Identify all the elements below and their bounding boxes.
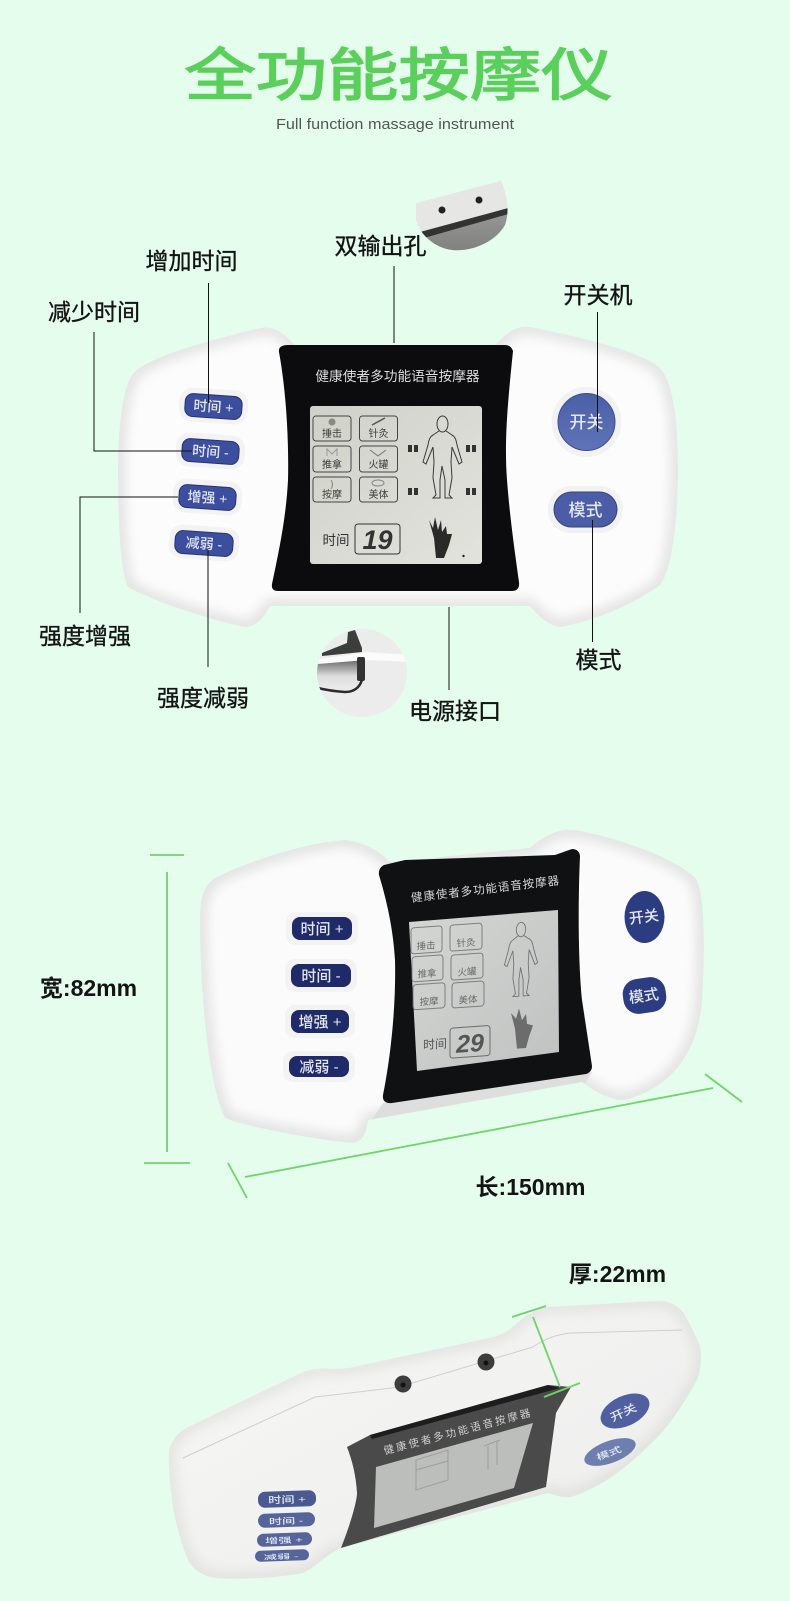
seam line [183,1330,682,1458]
button: 时间 -: 时间 - [301,968,341,985]
button: 减弱 - [168,524,240,562]
bezel heading: 健康使者多功能语音按摩器 [315,368,480,384]
callout: 强度减弱: 强度减弱 [157,685,249,711]
button: 增强 + [257,1532,312,1547]
mode box: 火罐: 火罐 [368,458,388,471]
callout: 强度增强 [39,497,178,649]
button: 时间 -: 时间 - [192,442,230,461]
button: 模式: 模式 [595,1444,623,1463]
button: 开关 [552,387,622,457]
output jack right [478,1354,494,1370]
bezel heading: 健康使者多功能语音按摩器 [410,873,561,905]
button: 时间 -: 时间 - [269,1515,304,1527]
mode box: 美体 [360,477,398,502]
device body [110,320,690,640]
device body [160,1295,710,1585]
mode box: 针灸: 针灸 [368,427,388,440]
button: 时间 + [286,912,358,945]
LCD contents: 按摩 [420,995,439,1008]
device 2: dimension view [190,825,715,1150]
device body [190,825,715,1150]
body figure [423,416,462,498]
thickness label: 厚:22mm [569,1261,666,1287]
button: 减弱 -: 减弱 - [264,1553,298,1562]
callout: 强度增强: 强度增强 [39,623,131,649]
callout: 双输出孔 [334,233,426,343]
time digits: 19 [362,525,393,555]
LCD contents [411,919,538,1062]
button: 减弱 - [283,1051,355,1082]
LCD contents: 推拿 [418,967,437,981]
callout: 开关机: 开关机 [564,282,632,308]
button: 开关 [595,1386,655,1436]
button: 时间 - [175,432,246,470]
button: 增强 +: 增强 + [187,488,228,507]
button: 模式: 模式 [568,501,602,520]
bezel heading: 健康使者多功能语音按摩器 [382,1406,534,1457]
width label: 宽:82mm [40,975,137,1001]
dimension: height 82mm [40,855,190,1163]
button: 减弱 -: 减弱 - [299,1059,339,1076]
output jack left [394,1376,412,1392]
dimension: length 150mm [228,1074,742,1200]
dimension: thickness 22mm [512,1261,666,1397]
display bezel [379,849,592,1103]
button: 开关: 开关 [628,907,660,928]
mode box: 美体: 美体 [368,488,388,501]
button: 时间 + [258,1490,316,1508]
length label: 长:150mm [476,1174,585,1200]
mode box: 推拿 [313,446,351,472]
button: 时间 +: 时间 + [193,397,234,416]
mode box: 针灸 [360,416,398,441]
time label: 时间 [322,533,350,548]
button: 模式 [621,975,668,1016]
time digits [450,1025,490,1059]
callout: 模式: 模式 [576,647,622,673]
callout: 电源接口: 电源接口 [409,698,501,724]
title: 全功能按摩仪 [184,44,613,107]
body figure [504,921,538,997]
subtitle: Full function massage instrument [276,116,515,133]
device 1: front view with button callouts [110,320,690,640]
LCD contents: 捶击 [417,939,435,953]
button: 开关 [624,891,664,943]
time digits: 29 [455,1029,484,1059]
button: 增强 + [285,1005,355,1038]
inset: power port close-up [315,628,410,720]
button: 模式 [548,486,623,533]
mode box: 按摩: 按摩 [322,488,342,501]
button: 时间 + [178,387,249,425]
mode box: 火罐 [360,446,398,472]
electrode bars [408,445,476,495]
button: 时间 - [258,1512,315,1528]
LCD screen [409,910,559,1071]
button: 时间 - [285,959,357,992]
LCD contents: 美体 [459,993,478,1007]
mode box: 按摩 [313,477,351,502]
hand icon [511,1007,533,1049]
time label: 时间 [423,1036,447,1052]
top edge shadow [370,1385,560,1439]
callout: 减少时间: 减少时间 [48,299,140,325]
device 3: top-edge view [160,1295,710,1585]
button: 减弱 - [255,1549,309,1562]
display bezel [341,1385,571,1548]
mode box: 捶击 [313,416,351,441]
button: 模式 [581,1432,639,1472]
LCD faint figure [416,1440,500,1490]
LCD contents: 针灸 [457,936,476,950]
button: 时间 +: 时间 + [301,921,344,938]
callout: 电源接口 [409,607,501,724]
LCD contents: 火罐 [458,965,477,979]
callout: 双输出孔: 双输出孔 [334,233,426,259]
LCD screen [374,1423,533,1528]
display bezel [272,345,519,591]
time digits [355,524,400,555]
button: 时间 +: 时间 + [268,1493,306,1506]
button: 开关: 开关 [608,1401,639,1424]
LCD screen [310,406,482,564]
hand icon [429,517,452,558]
button: 增强 + [172,478,243,516]
inset: output jacks close-up [416,180,508,250]
callout: 增加时间: 增加时间 [146,248,238,274]
mode box: 推拿: 推拿 [322,458,342,471]
button: 模式: 模式 [628,985,660,1007]
button: 增强 +: 增强 + [265,1534,303,1546]
callout: 减少时间 [48,299,192,451]
button: 减弱 -: 减弱 - [185,534,223,553]
mode box: 捶击: 捶击 [322,427,342,440]
indicator dot [462,555,465,557]
button: 开关: 开关 [570,413,604,432]
button: 增强 +: 增强 + [299,1013,342,1031]
